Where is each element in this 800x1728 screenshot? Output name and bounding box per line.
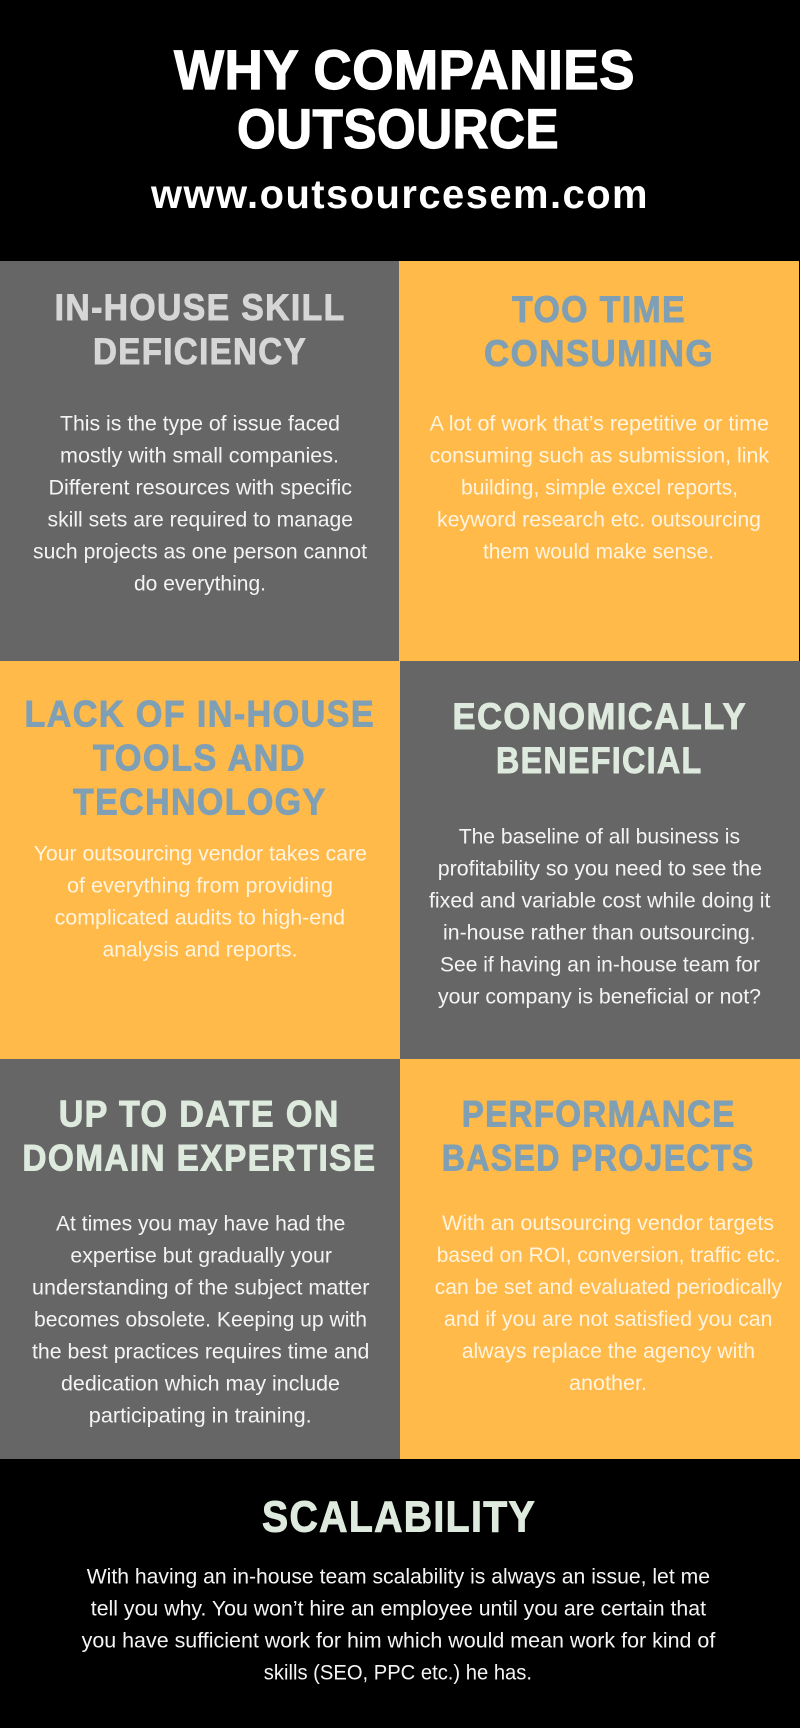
body text bbox=[82, 1564, 715, 1684]
body text: With an outsourcing vendor targets bbox=[442, 1211, 774, 1235]
heading bbox=[22, 1093, 376, 1179]
panel: title header bbox=[150, 38, 649, 217]
body text bbox=[430, 412, 769, 564]
heading: DOMAIN EXPERTISE bbox=[22, 1137, 376, 1179]
body text: fixed and variable cost while doing it bbox=[429, 888, 770, 912]
heading: CONSUMING bbox=[484, 332, 714, 374]
body text: Your outsourcing vendor takes care bbox=[34, 841, 367, 865]
title: OUTSOURCE bbox=[237, 97, 559, 160]
body text: A lot of work that’s repetitive or time bbox=[430, 412, 769, 436]
body text: the best practices requires time and bbox=[32, 1340, 369, 1364]
heading bbox=[55, 286, 346, 372]
body text bbox=[33, 412, 367, 596]
body text: consuming such as submission, link bbox=[430, 444, 769, 468]
heading bbox=[24, 693, 375, 823]
heading: SCALABILITY bbox=[262, 1493, 536, 1542]
website url: www.outsourcesem.com bbox=[150, 171, 649, 217]
body text: With having an in-house team scalability is always an issue, let me bbox=[87, 1564, 710, 1588]
body text: At times you may have had the bbox=[56, 1212, 345, 1236]
body text: understanding of the subject matter bbox=[32, 1276, 369, 1300]
body text: another. bbox=[569, 1371, 647, 1395]
body text: always replace the agency with bbox=[462, 1339, 755, 1363]
body text: of everything from providing bbox=[67, 873, 333, 897]
body text: your company is beneficial or not? bbox=[438, 984, 761, 1008]
body text: skills (SEO, PPC etc.) he has. bbox=[264, 1660, 532, 1684]
heading: BASED PROJECTS bbox=[442, 1137, 755, 1179]
heading: DEFICIENCY bbox=[93, 330, 307, 372]
body text: Different resources with specific bbox=[48, 476, 352, 500]
panel: too time consuming bbox=[399, 261, 799, 661]
heading: BENEFICIAL bbox=[496, 739, 702, 781]
heading bbox=[452, 695, 747, 781]
heading: ECONOMICALLY bbox=[452, 695, 747, 737]
body text bbox=[429, 824, 770, 1008]
body text: expertise but gradually your bbox=[70, 1244, 332, 1268]
heading: IN-HOUSE SKILL bbox=[55, 286, 346, 328]
body text: analysis and reports. bbox=[102, 937, 298, 961]
panel: economically beneficial bbox=[400, 661, 800, 1059]
panel background bbox=[400, 1059, 800, 1459]
panel background bbox=[0, 1059, 400, 1459]
heading: LACK OF IN-HOUSE bbox=[24, 693, 375, 735]
panel: in-house skill deficiency bbox=[0, 261, 399, 661]
body text bbox=[435, 1211, 782, 1395]
body text: skill sets are required to manage bbox=[48, 508, 353, 532]
body text: you have sufficient work for him which would mean work for kind of bbox=[82, 1628, 715, 1652]
body text: profitability so you need to see the bbox=[438, 856, 762, 880]
panel background bbox=[0, 261, 399, 661]
body text: based on ROI, conversion, traffic etc. bbox=[437, 1243, 781, 1267]
body text bbox=[32, 1212, 369, 1428]
body text: See if having an in-house team for bbox=[440, 952, 760, 976]
body text: dedication which may include bbox=[61, 1372, 340, 1396]
body text: tell you why. You won’t hire an employee until you are certain that bbox=[91, 1596, 706, 1620]
panel: up to date on domain expertise bbox=[0, 1059, 400, 1459]
body text bbox=[34, 841, 367, 961]
body text: and if you are not satisfied you can bbox=[444, 1307, 772, 1331]
body text: complicated audits to high-end bbox=[55, 905, 345, 929]
heading: UP TO DATE ON bbox=[59, 1093, 340, 1135]
body text: do everything. bbox=[134, 572, 266, 596]
panel background bbox=[0, 661, 400, 1059]
body text: participating in training. bbox=[89, 1404, 312, 1428]
body text: building, simple excel reports, bbox=[461, 476, 738, 500]
body text: This is the type of issue faced bbox=[60, 412, 340, 436]
panel background bbox=[400, 661, 800, 1059]
body text: such projects as one person cannot bbox=[33, 540, 367, 564]
body text: becomes obsolete. Keeping up with bbox=[34, 1308, 367, 1332]
body text: in-house rather than outsourcing. bbox=[443, 920, 756, 944]
heading: TOO TIME bbox=[512, 288, 686, 330]
body text: mostly with small companies. bbox=[60, 444, 339, 468]
heading: TOOLS AND bbox=[93, 737, 306, 779]
panel background bbox=[399, 261, 799, 661]
heading bbox=[442, 1093, 755, 1179]
heading: TECHNOLOGY bbox=[73, 781, 326, 823]
panel: lack of in-house tools and technology bbox=[0, 661, 400, 1059]
title: WHY COMPANIES bbox=[174, 38, 635, 101]
body text: The baseline of all business is bbox=[459, 824, 740, 848]
heading: PERFORMANCE bbox=[462, 1093, 736, 1135]
body text: keyword research etc. outsourcing bbox=[437, 508, 761, 532]
title bbox=[174, 38, 635, 160]
body text: can be set and evaluated periodically bbox=[435, 1275, 782, 1299]
body text: them would make sense. bbox=[483, 540, 714, 564]
panel: scalability bbox=[82, 1493, 715, 1684]
heading bbox=[484, 288, 714, 374]
panel: performance based projects bbox=[400, 1059, 800, 1459]
